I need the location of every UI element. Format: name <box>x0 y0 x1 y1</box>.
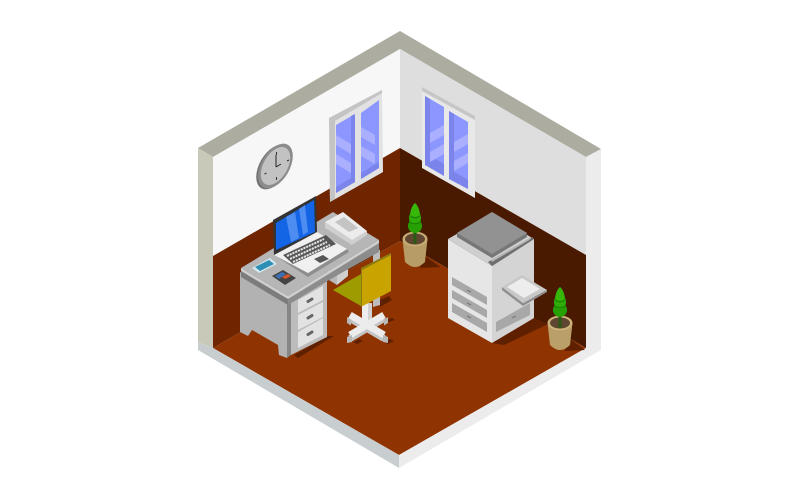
chair back <box>361 253 391 307</box>
left window <box>329 90 383 202</box>
chair base <box>347 315 388 343</box>
copier lid <box>457 212 527 258</box>
copier front bar <box>488 237 534 266</box>
far legs <box>328 270 337 285</box>
plant: right corner <box>548 287 585 351</box>
left wall end strip <box>198 148 213 348</box>
right lower wall <box>400 148 586 348</box>
chair shadows <box>350 296 395 344</box>
calculator <box>272 270 296 285</box>
left wall <box>213 49 400 256</box>
plant: back corner <box>402 203 440 268</box>
floor <box>213 241 586 455</box>
desk edge <box>241 268 288 305</box>
left pane <box>425 96 444 176</box>
room shell <box>198 31 601 468</box>
front dark strip <box>287 296 291 358</box>
copier left face <box>448 239 492 343</box>
floor slab right edge <box>399 348 601 468</box>
right wall <box>400 49 586 255</box>
paper tray <box>502 287 547 306</box>
copier drawers <box>452 277 487 305</box>
left side panel <box>240 272 287 358</box>
laptop <box>273 196 349 277</box>
chair seat <box>333 274 361 306</box>
phone <box>252 258 277 273</box>
right wall end strip <box>586 149 601 350</box>
desk <box>240 196 380 358</box>
top wall band <box>198 31 601 157</box>
copier right face <box>492 239 534 343</box>
chair <box>333 253 395 344</box>
right pane <box>361 100 379 179</box>
fax printer <box>325 222 367 245</box>
left lower wall <box>213 148 400 348</box>
under-desk band <box>287 245 379 302</box>
desk shadow <box>294 336 334 358</box>
drawers <box>298 286 323 313</box>
right pane <box>449 111 468 189</box>
floor slab left edge <box>198 342 399 468</box>
photocopier <box>448 212 547 343</box>
pedestal front <box>291 277 327 355</box>
right window <box>422 87 475 198</box>
copier top <box>448 214 534 266</box>
desk top <box>241 212 379 296</box>
copier shadow <box>492 318 548 345</box>
clock <box>256 136 293 197</box>
chair stem <box>362 303 372 325</box>
left pane <box>336 114 355 193</box>
